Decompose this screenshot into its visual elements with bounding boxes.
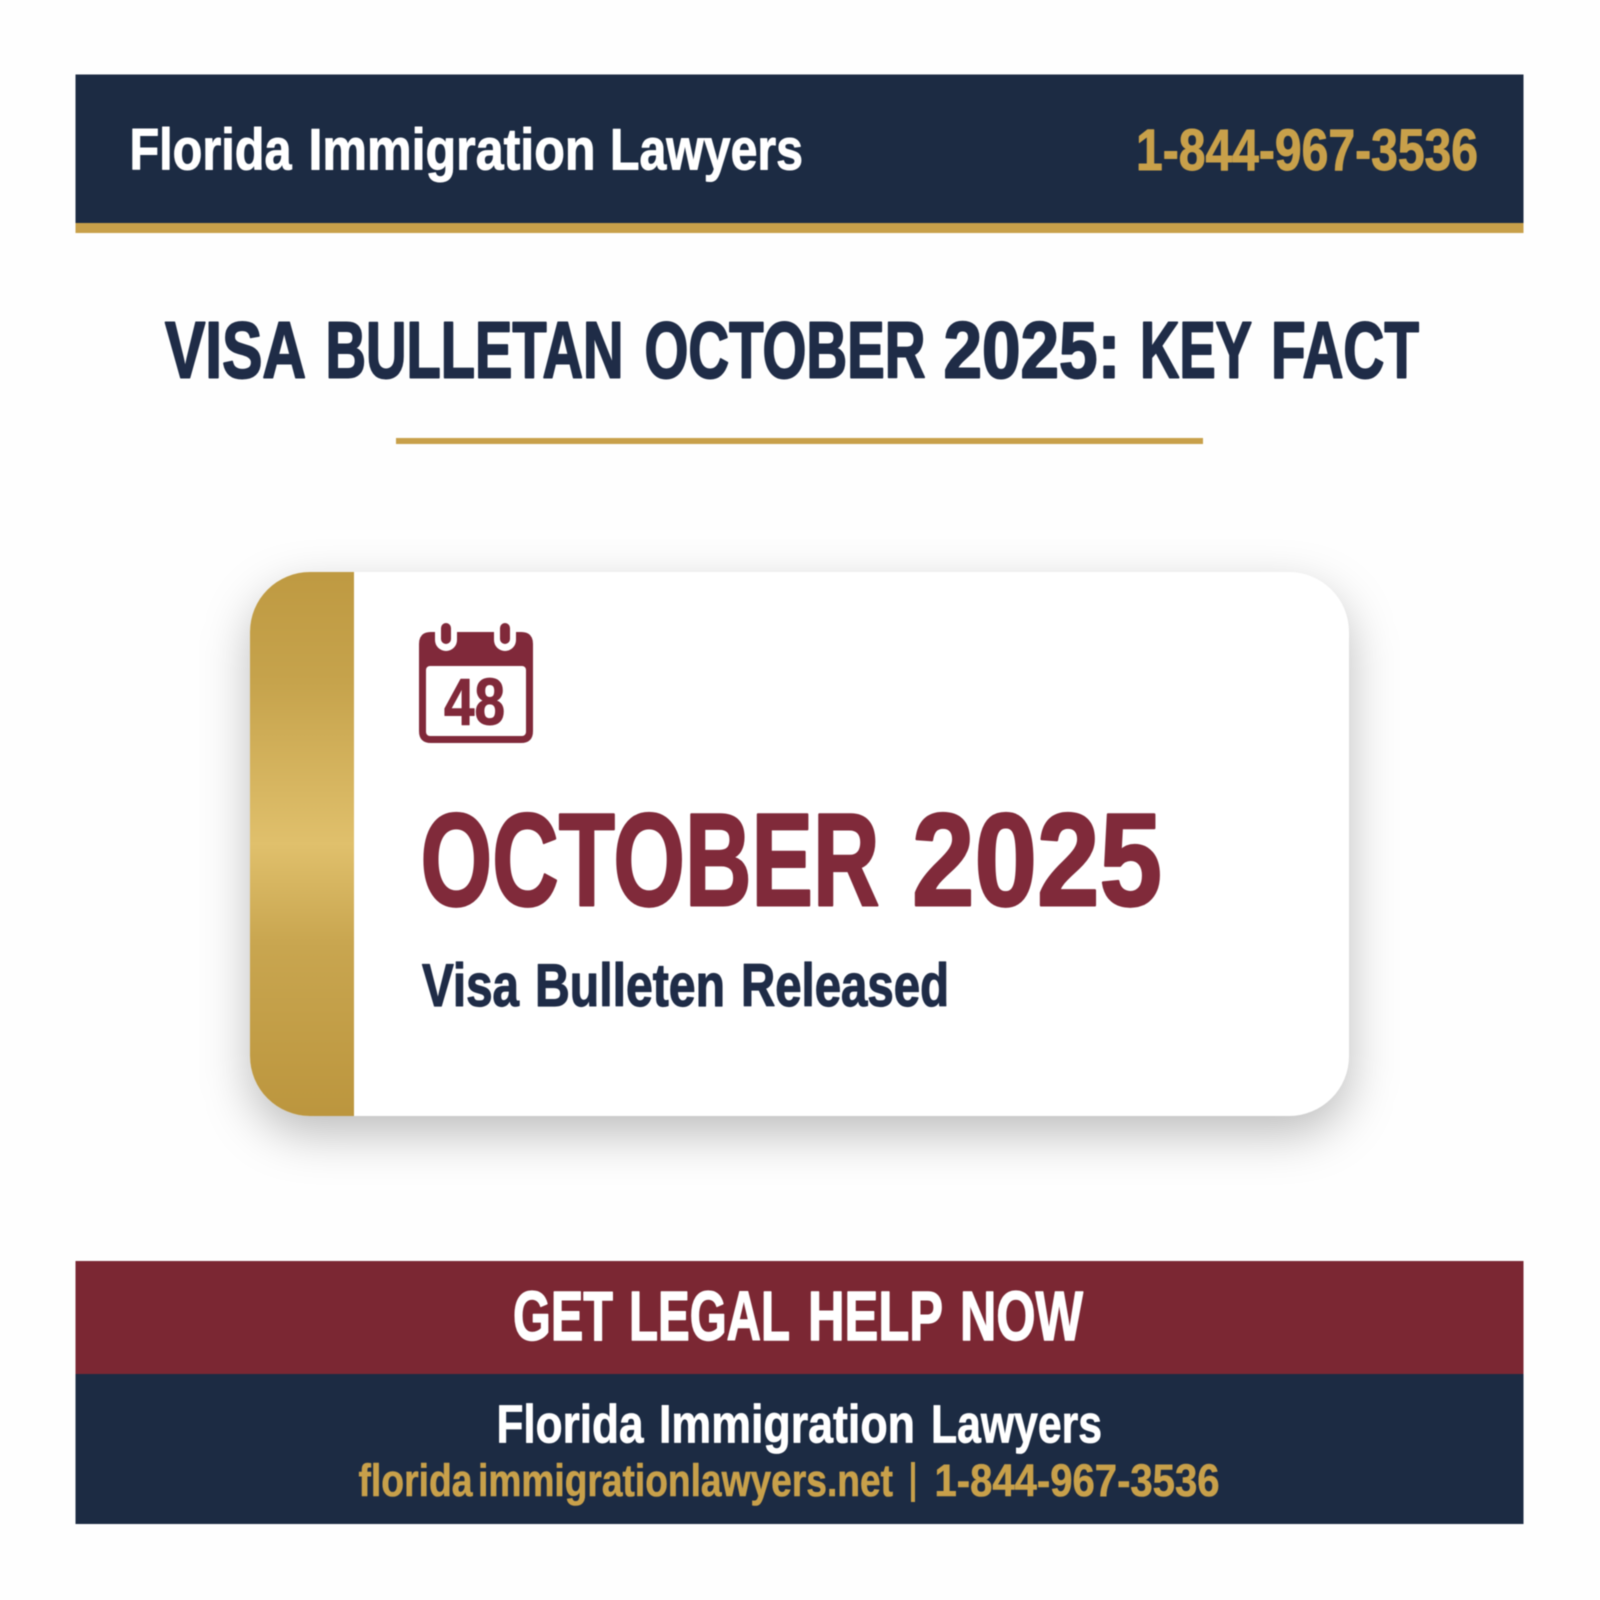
footer website: immigrationlawyers.net <box>478 1455 893 1506</box>
card subheading: Released <box>741 952 949 1019</box>
title: OCTOBER <box>644 305 926 394</box>
gold side strip <box>250 572 354 1116</box>
header phone number: 1-844-967-3536 <box>1136 118 1478 183</box>
footer phone number: 1-844-967-3536 <box>934 1455 1220 1506</box>
call to action bar: GET <box>513 1277 613 1355</box>
card subheading <box>422 952 949 1019</box>
header firm name: Florida <box>130 118 292 182</box>
title <box>165 305 1419 394</box>
icon: calendar: 48 <box>444 664 505 738</box>
panel: date card <box>250 572 1349 1134</box>
call to action bar: LEGAL <box>629 1277 790 1355</box>
footer firm name: Lawyers <box>931 1395 1102 1455</box>
call to action bar: NOW <box>960 1277 1083 1355</box>
footer website: florida <box>358 1455 473 1506</box>
footer firm name: Florida <box>496 1395 644 1455</box>
title: KEY <box>1140 305 1252 394</box>
footer firm name <box>496 1395 1102 1455</box>
footer firm name: Immigration <box>659 1395 915 1455</box>
header firm name: Lawyers <box>610 118 803 182</box>
icon: calendar <box>419 620 533 743</box>
footer separator <box>911 1462 915 1502</box>
call to action bar: HELP <box>808 1277 943 1355</box>
footer website <box>358 1455 893 1506</box>
header bar <box>76 74 1524 233</box>
header firm name: Immigration <box>308 118 596 182</box>
card subheading: Bulleten <box>535 952 725 1019</box>
call to action bar <box>76 1261 1524 1374</box>
footer contact bar <box>76 1374 1524 1524</box>
title underline <box>396 438 1203 444</box>
card subheading: Visa <box>422 952 520 1019</box>
title: BULLETAN <box>326 305 624 394</box>
card date heading: 2025 <box>912 786 1162 933</box>
card date heading: OCTOBER <box>420 786 880 933</box>
title: 2025: <box>944 305 1120 394</box>
header firm name <box>130 118 803 182</box>
title: VISA <box>165 305 306 394</box>
title: FACT <box>1271 305 1419 394</box>
